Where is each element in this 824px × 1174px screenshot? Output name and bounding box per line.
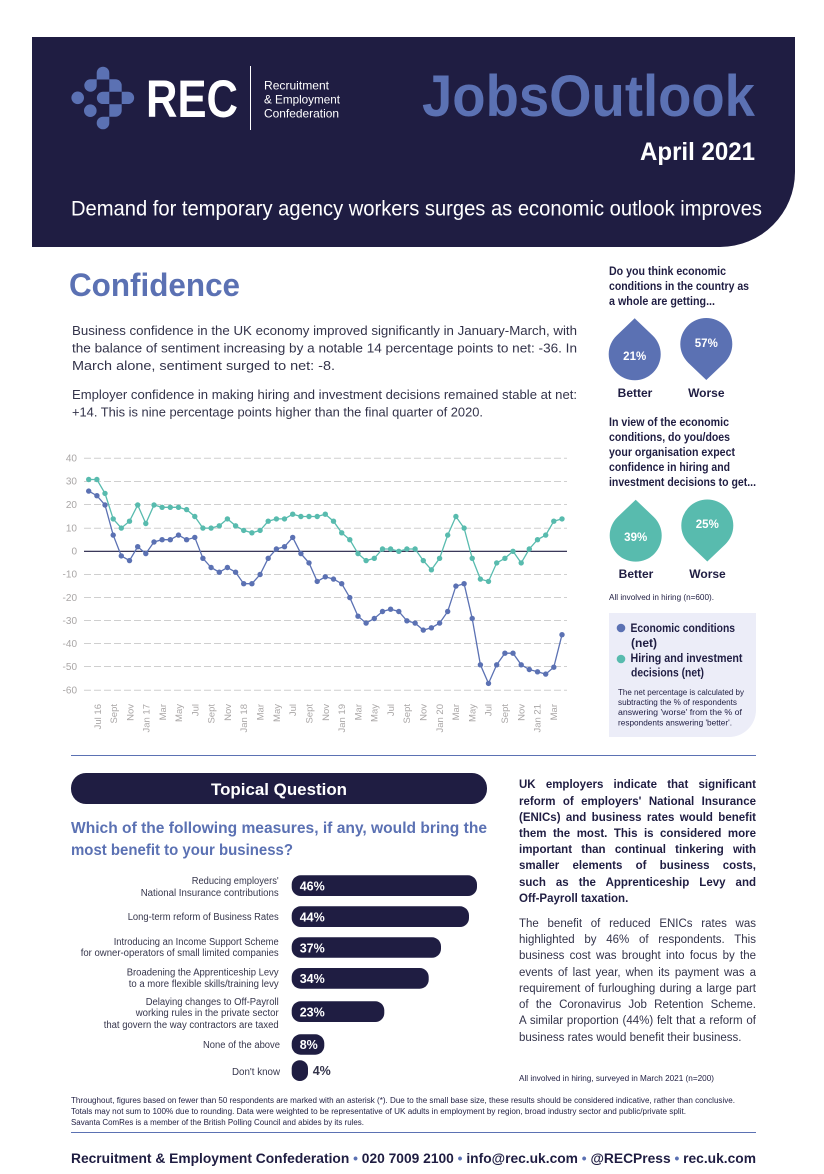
legend note	[618, 688, 744, 728]
legend: hiring and investment: decisions (net)	[631, 666, 704, 680]
topical summary bold text: them the most. This is considered more	[519, 828, 756, 840]
bar: Off-Payroll 23%: 23%	[300, 1006, 325, 1020]
x axis labels: Nov	[223, 704, 234, 721]
question: hiring and investment: confidence in hiring and	[609, 460, 730, 474]
x axis labels: Mar	[158, 704, 169, 720]
topical summary bold text: (ENICs) and business rates would benefit	[519, 812, 756, 824]
x axis labels: Jan 18	[239, 704, 250, 733]
bar: Don't know 4%	[232, 1060, 331, 1081]
x axis labels: Sept	[206, 704, 218, 724]
stat: economic worse 57%: Worse	[688, 386, 725, 400]
topical summary bold text	[519, 779, 756, 905]
y axis labels: -50	[63, 662, 77, 673]
question: economic conditions: a whole are getting...	[609, 294, 715, 308]
stat: hiring better 39%: 39%	[624, 532, 647, 544]
confidence text block: the balance of sentiment increasing by a notable 14 percentage points to net: -36. In	[72, 340, 577, 356]
topical question heading	[71, 820, 487, 859]
bar: National Insurance 46%	[141, 875, 477, 899]
y axis labels: -60	[63, 686, 77, 696]
x axis labels: Jan 19	[337, 704, 348, 733]
base note: All involved in hiring (n=600).	[609, 593, 714, 602]
x axis labels: May	[468, 704, 478, 722]
question: hiring and investment: In view of the economic	[609, 415, 729, 429]
question: hiring and investment: investment decisions to get...	[609, 475, 756, 489]
y axis labels: 20	[66, 500, 77, 511]
bar: National Insurance 46%: National Insurance contributions	[141, 888, 279, 899]
bar: Apprenticeship Levy 34%: 34%	[300, 972, 325, 986]
y axis labels: 30	[66, 477, 77, 488]
x axis labels: Nov	[126, 704, 136, 721]
x axis labels: Mar	[549, 704, 560, 720]
question: hiring and investment: conditions, do you/does	[609, 430, 730, 444]
y axis labels: 40	[66, 454, 77, 464]
series: economic conditions	[89, 491, 562, 683]
topical question banner	[71, 773, 487, 804]
x axis labels: Nov	[321, 704, 332, 721]
stat: economic better 21%: 21%	[623, 351, 646, 363]
x axis labels: Sept	[402, 704, 413, 724]
x axis labels	[93, 704, 560, 733]
headline: Demand for temporary agency workers surges as economic outlook improves	[71, 198, 762, 220]
x axis labels: May	[272, 704, 283, 722]
bar: None of the above 8%: None of the above	[203, 1040, 280, 1051]
x axis labels: Jan 21	[532, 704, 544, 733]
topical body text: business cost was brought into focus by the	[519, 950, 756, 962]
bar: Apprenticeship Levy 34%	[127, 968, 429, 990]
stat: hiring worse 25%	[681, 500, 733, 581]
footnotes	[71, 1096, 735, 1127]
topical body text: events of last year, when its payment was a	[519, 967, 756, 979]
footnotes: Throughout, figures based on fewer than 50 respondents are marked with an asterisk (*). Due to the small base size, these results should be considered indicative, rather than conclusive.	[71, 1096, 735, 1105]
stat: economic worse 57%	[680, 318, 732, 400]
topical body text: The benefit of reduced ENICs rates was	[519, 918, 756, 930]
topical question heading: most benefit to your business?	[71, 842, 293, 859]
bar: Don't know 4%: 4%	[313, 1064, 331, 1078]
topical body text: requirement of furloughing during a large part	[519, 983, 756, 995]
x axis labels: Jul	[484, 704, 494, 716]
bar: Business Rates 44%: 44%	[300, 910, 325, 924]
x axis labels: Jan 17	[142, 704, 152, 733]
x axis labels: Sept	[304, 704, 316, 724]
legend panel	[609, 613, 756, 737]
series: hiring and investment decisions	[89, 480, 562, 581]
logo organisation name	[264, 78, 341, 120]
legend note: subtracting the % of respondents	[618, 698, 737, 707]
y axis labels	[63, 454, 77, 696]
topical summary bold text: such as the Apprenticeship Levy and	[519, 877, 756, 889]
bar: Apprenticeship Levy 34%: Broadening the Apprenticeship Levy	[127, 968, 279, 978]
x axis labels: Jul	[386, 704, 397, 716]
x axis labels: May	[174, 704, 185, 722]
topical question banner: Topical Question	[211, 780, 347, 799]
bar: Income Support Scheme 37%	[81, 937, 441, 959]
footnotes: Totals may not sum to 100% due to rounding. Data were weighted to be representative of UK adults in employment by region, broad industry sector and public/private split.	[71, 1107, 686, 1116]
bar: National Insurance 46%: Reducing employers'	[192, 876, 279, 887]
topical body text: business rates would benefit their business.	[519, 1032, 741, 1044]
question: hiring and investment: your organisation expect	[609, 445, 735, 459]
x axis labels: Jul	[190, 704, 202, 716]
x axis labels: Mar	[354, 704, 364, 720]
topical body text	[519, 918, 756, 1044]
stat: hiring better 39%	[610, 500, 662, 581]
legend: economic conditions: Economic conditions	[630, 621, 735, 635]
topical base note: All involved in hiring, surveyed in March 2021 (n=200)	[519, 1074, 714, 1083]
legend: economic conditions: (net)	[631, 636, 657, 650]
bar: Off-Payroll 23%: working rules in the private sector	[135, 1008, 279, 1019]
section heading: Confidence: Confidence	[69, 267, 240, 303]
question: hiring and investment	[609, 415, 756, 489]
confidence text block: Business confidence in the UK economy improved significantly in January-March, with	[72, 323, 577, 338]
x axis labels: May	[370, 704, 380, 722]
topical summary bold text: important than continual tinkering with	[519, 844, 756, 856]
y axis labels: -10	[63, 570, 77, 581]
x axis labels: Jan 20	[435, 704, 446, 733]
y axis labels: 0	[71, 546, 77, 558]
y axis labels: -30	[63, 616, 77, 627]
legend: economic conditions	[617, 621, 735, 650]
x axis labels: Mar	[451, 704, 462, 720]
y axis labels: -40	[63, 639, 77, 650]
y axis labels: 10	[66, 523, 77, 534]
header banner	[32, 37, 795, 247]
bar chart: measures	[81, 875, 477, 1081]
confidence text block: March alone, sentiment surged to net: -8.	[72, 358, 335, 373]
bar: None of the above 8%: 8%	[300, 1038, 318, 1052]
bar: Income Support Scheme 37%: Introducing an Income Support Scheme	[114, 937, 279, 948]
x axis labels: Sept	[500, 704, 511, 724]
stat: economic worse 57%: 57%	[695, 338, 718, 350]
logo organisation name: Confederation	[264, 106, 339, 120]
stat: economic better 21%	[609, 318, 661, 400]
confidence text block	[72, 323, 577, 420]
question: economic conditions: Do you think economic	[609, 264, 726, 278]
x axis labels: Nov	[516, 704, 528, 721]
topical body text: A similar proportion (44%) felt that a reform of	[519, 1015, 756, 1027]
bar: Off-Payroll 23%	[104, 997, 384, 1031]
footer contact line: Recruitment & Employment Confederation • 020 7009 2100 • info@rec.uk.com • @RECPress • rec.uk.com	[71, 1151, 756, 1166]
stat: hiring better 39%: Better	[619, 567, 654, 581]
logo organisation name: & Employment	[264, 92, 341, 106]
topical body text: highlighted by 46% of respondents. This	[519, 934, 756, 946]
bar: Off-Payroll 23%: that govern the way contractors are taxed	[104, 1020, 279, 1031]
stat: hiring worse 25%: Worse	[689, 567, 726, 581]
topical summary bold text: reform of employers' National Insurance	[519, 796, 756, 808]
bar: Don't know 4%: Don't know	[232, 1067, 281, 1078]
icon: REC logo mark	[71, 67, 134, 129]
logo organisation name: Recruitment	[264, 78, 330, 92]
publication title: JobsOutlook	[422, 64, 756, 129]
x axis labels: Nov	[418, 704, 430, 721]
x axis labels: Jul 16	[93, 704, 104, 729]
legend: hiring and investment: Hiring and investment	[630, 651, 742, 665]
bar: Income Support Scheme 37%: for owner-operators of small limited companies	[81, 948, 279, 959]
legend: hiring and investment	[617, 651, 742, 680]
stat: economic better 21%: Better	[618, 386, 653, 400]
topical summary bold text: UK employers indicate that significant	[519, 779, 756, 791]
y axis labels: -20	[63, 593, 77, 604]
legend note: respondents answering 'better'.	[618, 718, 732, 728]
topical summary bold text: smaller elements of business costs,	[519, 860, 756, 872]
bar: None of the above 8%	[203, 1034, 324, 1055]
question: economic conditions: conditions in the country as	[609, 279, 749, 293]
publication date: April 2021	[640, 138, 755, 166]
legend note: answering 'worse' from the % of	[618, 708, 743, 717]
bar: Off-Payroll 23%: Delaying changes to Off-Payroll	[146, 997, 279, 1008]
x axis labels: Jul	[288, 704, 299, 716]
topical question heading: Which of the following measures, if any, would bring the	[71, 820, 487, 837]
logo wordmark: REC	[146, 70, 238, 129]
footnotes: Savanta ComRes is a member of the British Polling Council and abides by its rules.	[71, 1118, 364, 1127]
topical body text: of the Coronavirus Job Retention Scheme.	[519, 999, 756, 1011]
x axis labels: Mar	[256, 704, 266, 720]
x axis labels: Sept	[109, 704, 120, 724]
line chart: net confidence	[63, 454, 567, 733]
stat: hiring worse 25%: 25%	[696, 519, 719, 531]
bar: Apprenticeship Levy 34%: to a more flexible skills/training levy	[129, 979, 279, 990]
confidence text block: Employer confidence in making hiring and investment decisions remained stable at net:	[72, 387, 577, 402]
confidence text block: +14. This is nine percentage points higher than the final quarter of 2020.	[72, 404, 483, 420]
question: economic conditions	[609, 264, 749, 308]
bar: Income Support Scheme 37%: 37%	[300, 942, 325, 956]
topical summary bold text: Off-Payroll taxation.	[519, 893, 628, 905]
bar: National Insurance 46%: 46%	[300, 880, 325, 894]
bar: Business Rates 44%	[128, 906, 469, 927]
bar: Business Rates 44%: Long-term reform of Business Rates	[128, 912, 279, 923]
legend note: The net percentage is calculated by	[618, 688, 744, 697]
